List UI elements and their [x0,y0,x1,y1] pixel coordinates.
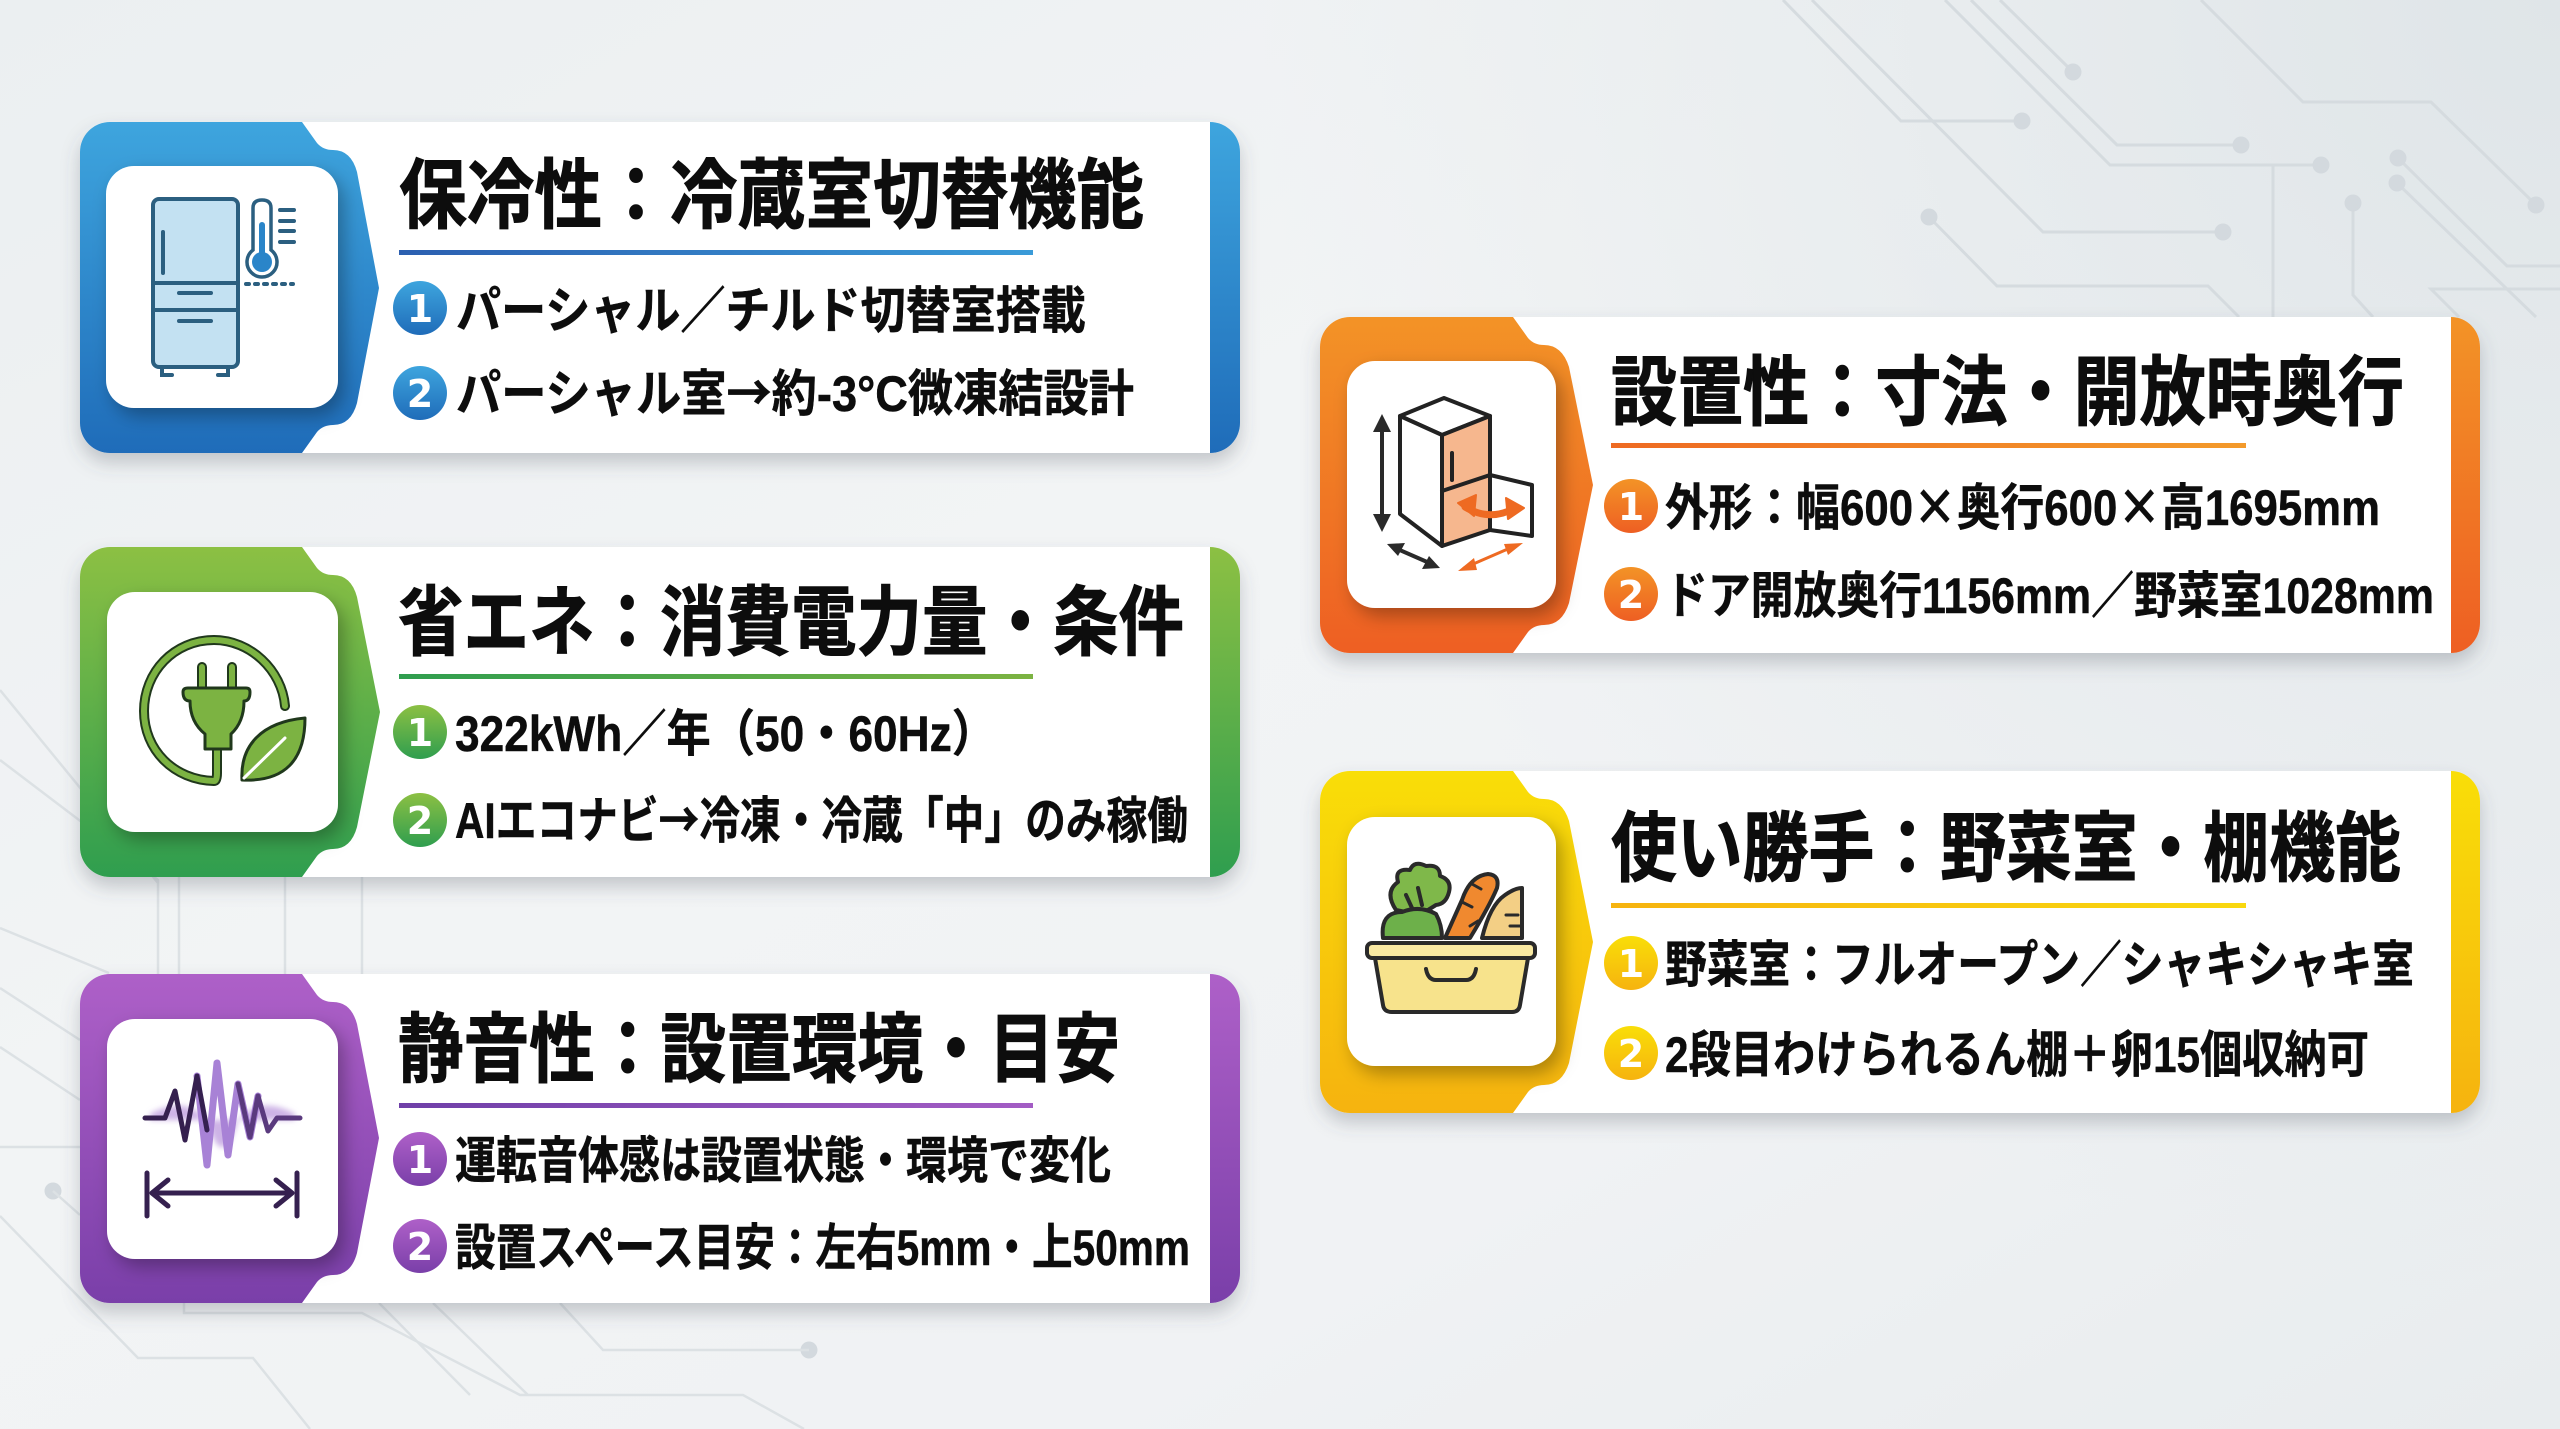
badge 1 [393,705,447,759]
badge 2: 2 [407,799,433,843]
badge 2 [393,793,447,847]
icon: fridge with thermometer [153,199,294,375]
icon: fridge dimensions [1373,398,1532,571]
badge 1: 1 [407,711,433,755]
badge 2: 2 [407,372,433,416]
panel: 使い勝手 [1320,771,2480,1113]
heading: 保冷性：冷蔵室切替機能 [399,154,1144,239]
heading: 省エネ：消費電力量・条件 [398,581,1184,666]
badge 1 [393,1132,447,1186]
heading underline [1611,903,2246,908]
heading: 設置性：寸法・開放時奥行 [1611,351,2404,436]
heading: 静音性：設置環境・目安 [398,1008,1120,1093]
item 2: 設置スペース目安：左右5mm・上50mm [455,1220,1190,1276]
card body [80,547,1240,877]
badge 1: 1 [1618,485,1644,529]
badge 2: 2 [1618,573,1644,617]
card body [80,974,1240,1303]
colored tab [80,974,379,1303]
colored tab [80,547,380,877]
item 2: 2段目わけられるん棚＋卵15個収納可 [1665,1027,2369,1083]
panel: 静音性 [80,974,1240,1303]
icon box [1347,361,1556,608]
icon box [106,166,338,408]
right accent bar [1210,122,1240,453]
icon box [107,592,338,832]
card body [1320,317,2480,653]
icon: sound wave with width arrow [145,1063,300,1216]
card body [80,122,1240,453]
item 2: ドア開放奥行1156mm／野菜室1028mm [1665,568,2434,624]
card body [1320,771,2480,1113]
badge 2 [393,366,447,420]
item 2: パーシャル室→約-3°C微凍結設計 [456,354,1134,426]
icon: plug and leaf [144,640,305,781]
icon box [107,1019,338,1259]
badge 1 [1604,479,1658,533]
heading: 使い勝手：野菜室・棚機能 [1611,807,2401,892]
item 1: 野菜室：フルオープン／シャキシャキ室 [1665,937,2414,993]
heading underline [399,674,1033,679]
colored tab [1320,771,1593,1113]
heading underline [1611,443,2246,448]
item 1: 322kWh／年（50・60Hz） [455,706,996,762]
icon box [1347,817,1556,1066]
colored tab [1320,317,1593,653]
panel: 省エネ [80,547,1240,877]
item 1: 外形：幅600×奥行600×高1695mm [1665,468,2380,540]
item 1: パーシャル／チルド切替室搭載 [456,283,1086,339]
badge 1 [393,281,447,335]
panel: 設置性 [1320,317,2480,653]
item 1: 運転音体感は設置状態・環境で変化 [455,1133,1111,1189]
icon: vegetable basket [1367,864,1535,1012]
right accent bar [1210,547,1240,877]
panel: 保冷性 [80,122,1240,453]
right accent bar [1210,974,1240,1303]
badge 1: 1 [407,1138,433,1182]
badge 2: 2 [407,1225,433,1269]
badge 1: 1 [407,287,433,331]
right accent bar [2451,771,2480,1113]
badge 1: 1 [1618,942,1644,986]
badge 2 [1604,567,1658,621]
heading underline [399,1103,1033,1108]
item 2: AIエコナビ→冷凍・冷蔵「中」のみ稼働 [455,781,1188,853]
badge 1 [1604,936,1658,990]
right accent bar [2451,317,2480,653]
badge 2 [1604,1026,1658,1080]
heading underline [399,250,1033,255]
badge 2: 2 [1618,1032,1644,1076]
badge 2 [393,1219,447,1273]
colored tab [80,122,379,453]
